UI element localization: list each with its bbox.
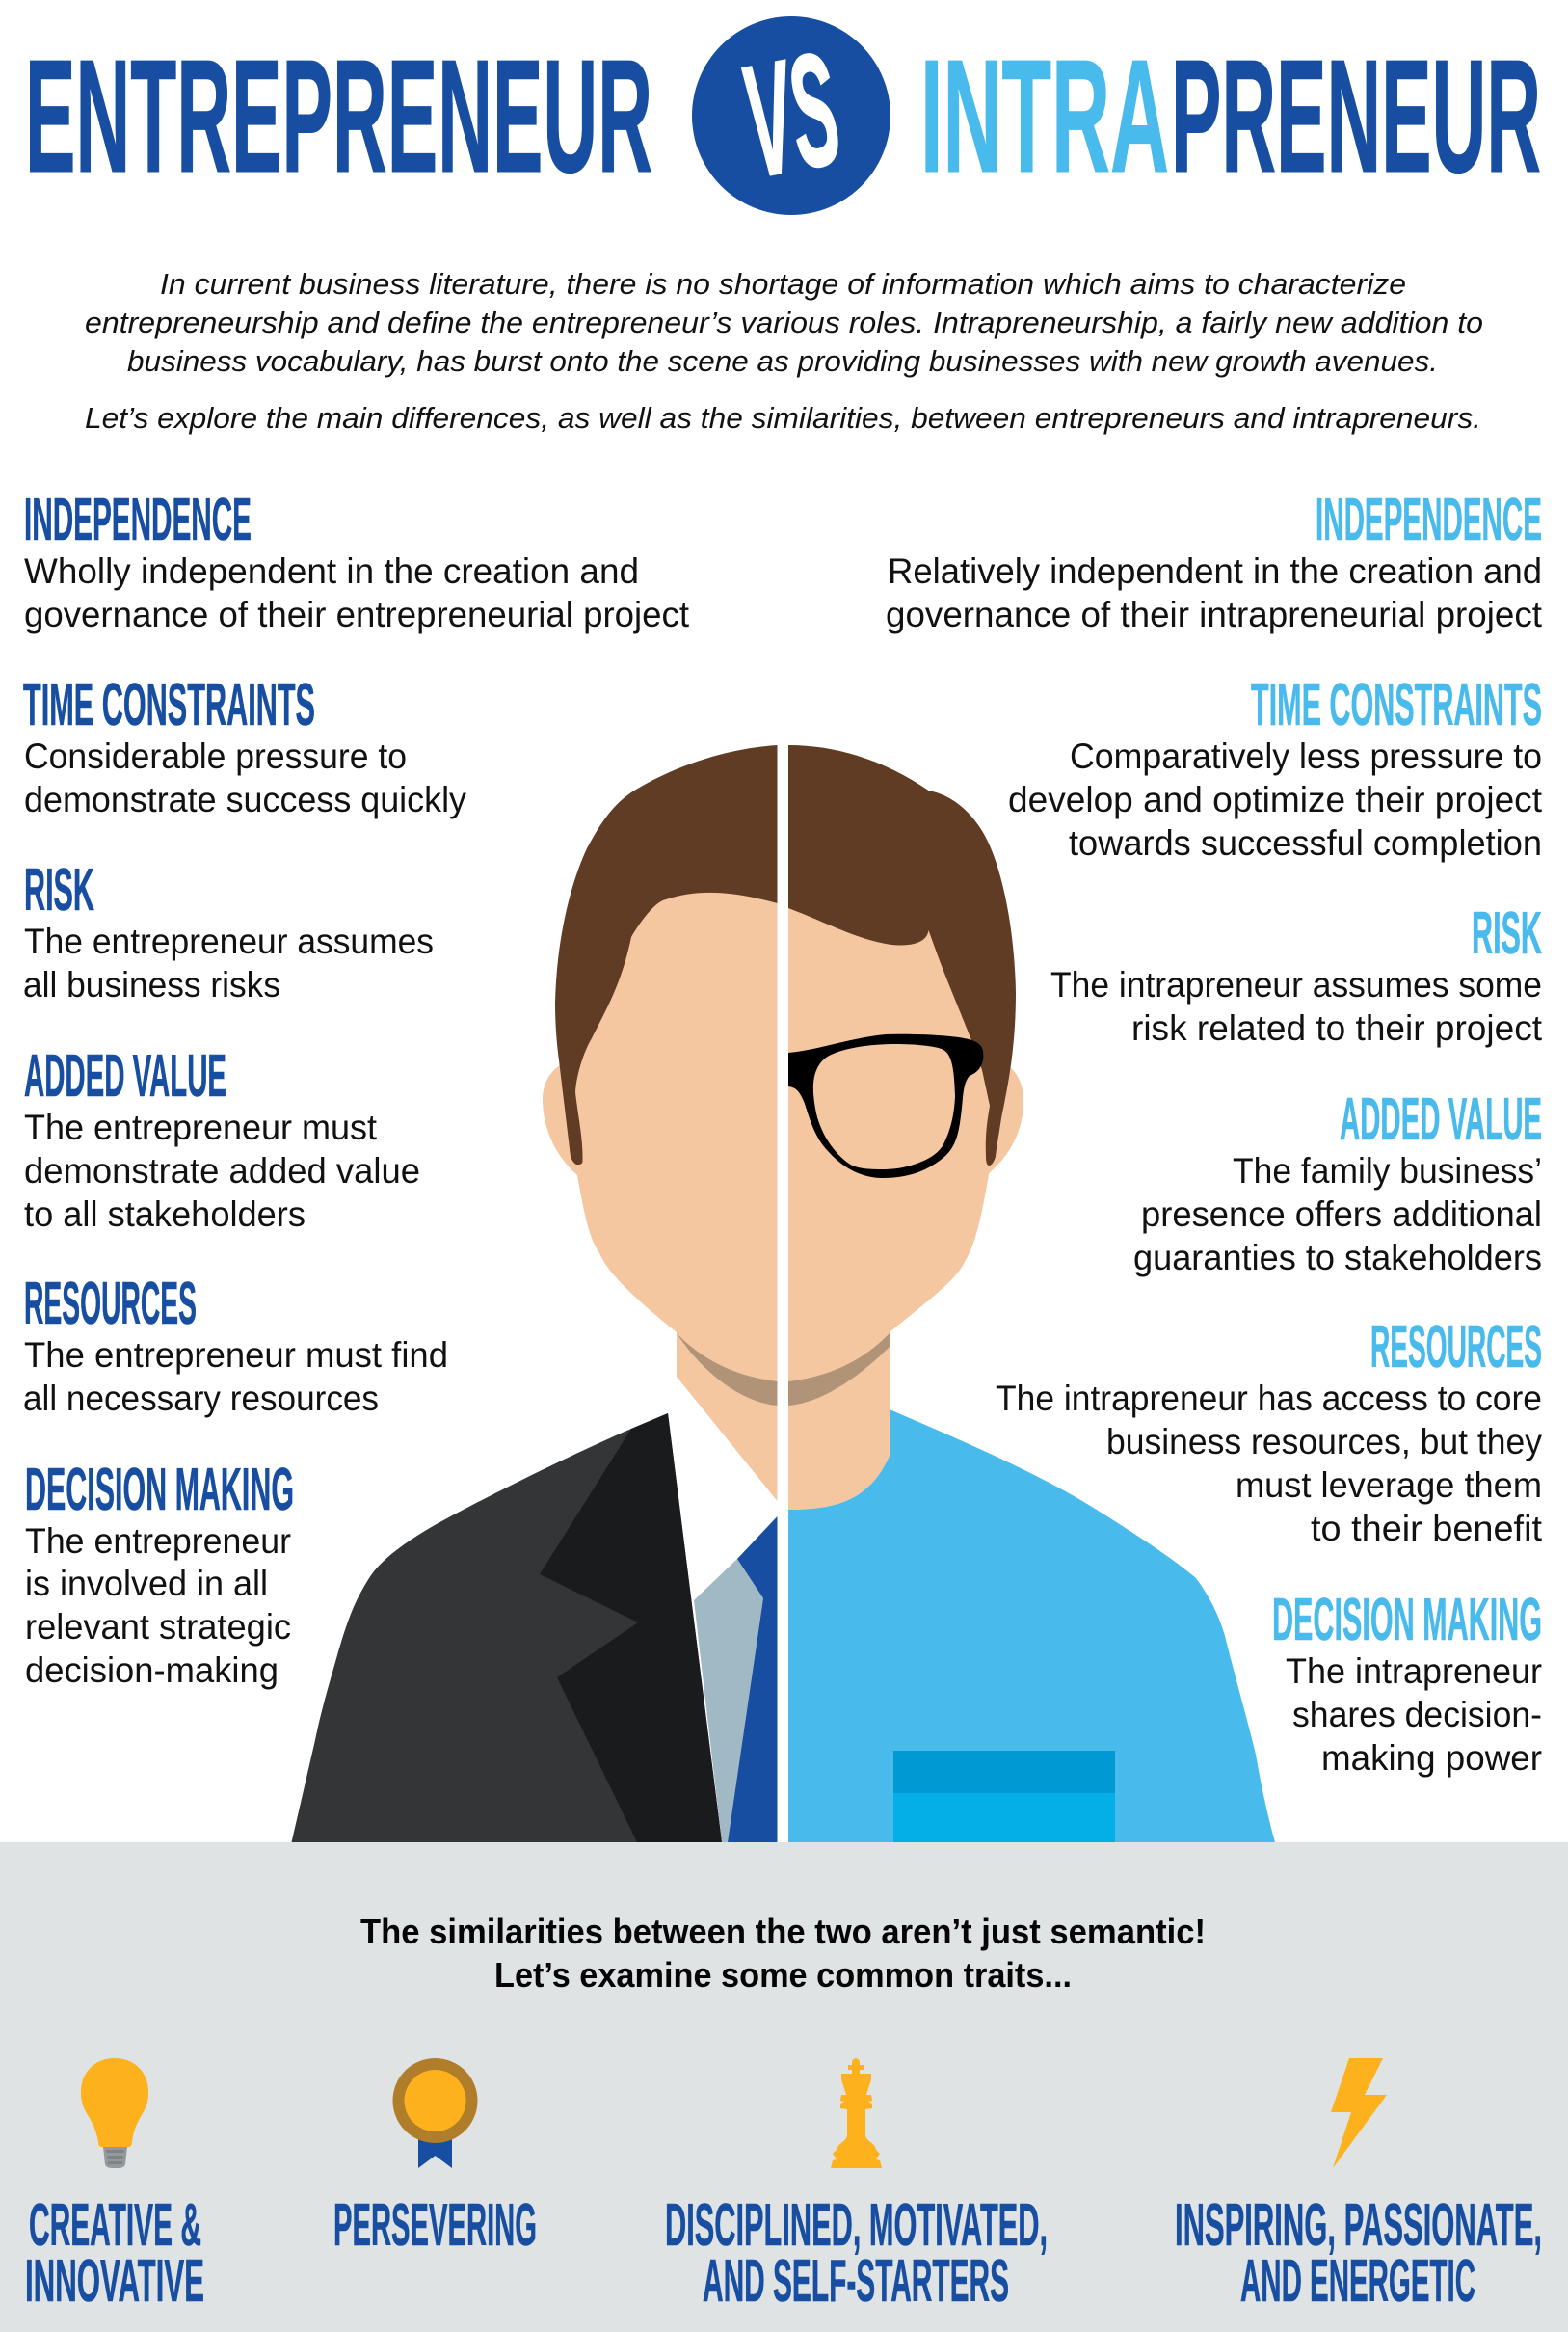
- risk: risk related to their project: [1131, 1008, 1543, 1048]
- trait: disciplined, motivated, self-starters: AND SELF-STARTERS: [703, 2247, 1009, 2315]
- added value: [1133, 1086, 1542, 1277]
- panel: common traits: PERSEVERING: [333, 2191, 537, 2259]
- risk: The intrapreneur assumes some: [1050, 965, 1542, 1005]
- decision making: [1272, 1586, 1542, 1778]
- intro text: [85, 267, 1483, 435]
- independence: Wholly independent in the creation and: [24, 551, 639, 591]
- panel: intrapreneur column: [886, 486, 1543, 1778]
- independence: governance of their entrepreneurial project: [24, 595, 690, 634]
- independence: Relatively independent in the creation and: [888, 551, 1542, 591]
- right ear: [973, 1065, 1023, 1174]
- intro text: entrepreneurship and define the entrepreneur’s various roles. Intrapreneurship, a fairly new addition to: [85, 306, 1483, 339]
- panel: entrepreneur column: [23, 486, 690, 1690]
- left hair: [555, 745, 777, 1165]
- intro text: business vocabulary, has burst onto the scene as providing businesses with new growth avenues.: [127, 344, 1438, 378]
- jacket lapel: [540, 1413, 722, 1842]
- resources: all necessary resources: [23, 1379, 379, 1418]
- decision making: [25, 1456, 294, 1690]
- decision making: relevant strategic: [25, 1607, 291, 1647]
- tie: [728, 1516, 777, 1842]
- collar shadow: [694, 1559, 763, 1842]
- time constraints: [23, 671, 466, 819]
- resources: The intrapreneur has access to core: [996, 1379, 1542, 1418]
- glasses: [788, 1034, 983, 1178]
- time constraints: develop and optimize their project: [1008, 780, 1543, 819]
- left ear: [543, 1063, 598, 1175]
- left face and neck: [575, 882, 777, 1501]
- independence: [24, 486, 690, 634]
- panel: common traits: CREATIVE &: [29, 2191, 201, 2259]
- blue shirt: [788, 1409, 1275, 1842]
- panel: common traits: INNOVATIVE: [25, 2247, 204, 2315]
- added value: to all stakeholders: [24, 1194, 306, 1234]
- icon: light bulb: [81, 2058, 148, 2168]
- time constraints: demonstrate success quickly: [24, 780, 466, 819]
- independence: INDEPENDENCE: [24, 486, 252, 553]
- time constraints: [1008, 671, 1543, 863]
- decision making: The entrepreneur: [25, 1521, 291, 1561]
- risk: [23, 856, 434, 1005]
- resources: must leverage them: [1236, 1465, 1542, 1505]
- resources: [996, 1313, 1543, 1548]
- trait: inspiring, passionate, energetic: [1175, 2191, 1542, 2315]
- suit jacket: [291, 1413, 722, 1842]
- panel: common traits: [0, 1842, 1568, 2332]
- time constraints: Comparatively less pressure to: [1070, 737, 1542, 776]
- neck shadow right: [788, 1333, 890, 1406]
- decision making: decision-making: [25, 1650, 279, 1690]
- added value: presence offers additional: [1141, 1194, 1542, 1234]
- added value: The entrepreneur must: [24, 1108, 378, 1147]
- illustration: half entrepreneur half intrapreneur portrait: [291, 745, 1275, 1842]
- shirt pocket: [893, 1751, 1115, 1842]
- decision making: The intrapreneur: [1286, 1651, 1542, 1691]
- time constraints: Considerable pressure to: [24, 737, 407, 776]
- vs badge: [692, 16, 890, 215]
- panel: entrepreneur column: DECISION MAKING: [25, 1456, 294, 1523]
- vs badge: VS: [730, 19, 853, 210]
- similarities heading: The similarities between the two aren’t just semantic!: [360, 1912, 1206, 1951]
- resources: RESOURCES: [24, 1270, 197, 1337]
- risk: [1050, 899, 1543, 1048]
- risk: all business risks: [23, 965, 280, 1005]
- independence: [886, 486, 1543, 634]
- time constraints: towards successful completion: [1069, 823, 1542, 863]
- icon: medal: [393, 2058, 478, 2168]
- right face and neck: [788, 897, 1002, 1510]
- added value: The family business’: [1233, 1151, 1542, 1191]
- intro text: In current business literature, there is no shortage of information which aims to characterize: [160, 267, 1406, 301]
- resources: business resources, but they: [1106, 1422, 1542, 1461]
- icon: chess king: [831, 2058, 882, 2168]
- risk: RISK: [24, 856, 94, 924]
- added value: ADDED VALUE: [24, 1042, 226, 1110]
- icon: lightning bolt: [1331, 2058, 1387, 2168]
- trait: disciplined, motivated, self-starters: [665, 2191, 1048, 2315]
- intro text: Let’s explore the main differences, as well as the similarities, between entrepreneurs and intrapreneurs.: [85, 401, 1481, 435]
- title: ENTREPRENEUR: [25, 27, 652, 206]
- added value: demonstrate added value: [24, 1151, 420, 1191]
- resources: The entrepreneur must find: [24, 1335, 448, 1375]
- decision making: is involved in all: [25, 1564, 268, 1603]
- added value: [24, 1042, 420, 1234]
- similarities heading: Let’s examine some common traits...: [494, 1955, 1072, 1995]
- decision making: making power: [1321, 1738, 1542, 1778]
- panel: common traits: DISCIPLINED, MOTIVATED,: [665, 2191, 1048, 2259]
- time constraints: TIME CONSTRAINTS: [23, 671, 315, 738]
- independence: governance of their intrapreneurial project: [886, 595, 1543, 634]
- neck shadow left: [677, 1333, 777, 1406]
- similarities heading: [360, 1912, 1206, 1995]
- right hair: [788, 745, 1016, 1166]
- risk: The entrepreneur assumes: [24, 922, 434, 961]
- added value: guaranties to stakeholders: [1133, 1238, 1542, 1277]
- title word: intrapreneur: INTRA: [920, 27, 1169, 206]
- resources: [23, 1270, 448, 1418]
- trait: creative and innovative: [25, 2191, 204, 2315]
- decision making: shares decision-: [1292, 1695, 1542, 1734]
- resources: to their benefit: [1311, 1509, 1543, 1548]
